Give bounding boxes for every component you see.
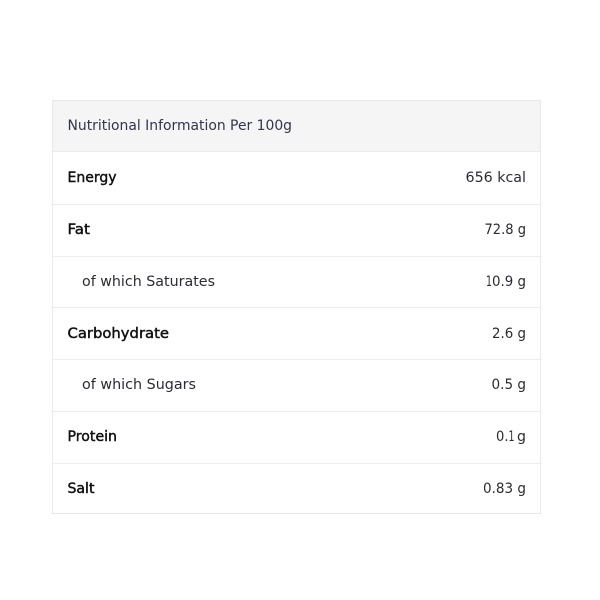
- row: salt: [68, 481, 526, 497]
- row: sugars: 0.5 g: [492, 377, 526, 393]
- header row: [53, 101, 540, 151]
- row: protein: [68, 429, 526, 445]
- row: protein: Protein: [68, 429, 117, 445]
- row: saturates: [82, 274, 526, 290]
- row: saturates: 0.9 g: [492, 274, 526, 290]
- row: sugars: [82, 377, 526, 393]
- row: protein: 0.: [496, 429, 508, 445]
- row: energy: 656 kcal: [466, 170, 526, 186]
- row: protein: g: [517, 429, 526, 445]
- heading: Nutritional Information Per 100g: [68, 118, 292, 134]
- row: energy: Energy: [68, 170, 117, 186]
- row: saturates: 1: [486, 274, 492, 290]
- row: fat: Fat: [68, 222, 90, 238]
- row: salt: Salt: [68, 481, 95, 497]
- row: carbohydrate: [68, 326, 526, 342]
- row: carbohydrate: Carbohydrate: [68, 326, 169, 342]
- row: energy: [68, 170, 526, 186]
- panel: nutrition table: [52, 100, 540, 514]
- row: carbohydrate: 2.6 g: [492, 326, 526, 342]
- row: sugars: of which Sugars: [82, 377, 196, 393]
- row: fat: 72.8 g: [484, 222, 526, 238]
- row: salt: 0.83 g: [483, 481, 526, 497]
- row: saturates: of which Saturates: [82, 274, 215, 290]
- row: fat: [68, 222, 526, 238]
- row: protein: 1: [508, 429, 514, 445]
